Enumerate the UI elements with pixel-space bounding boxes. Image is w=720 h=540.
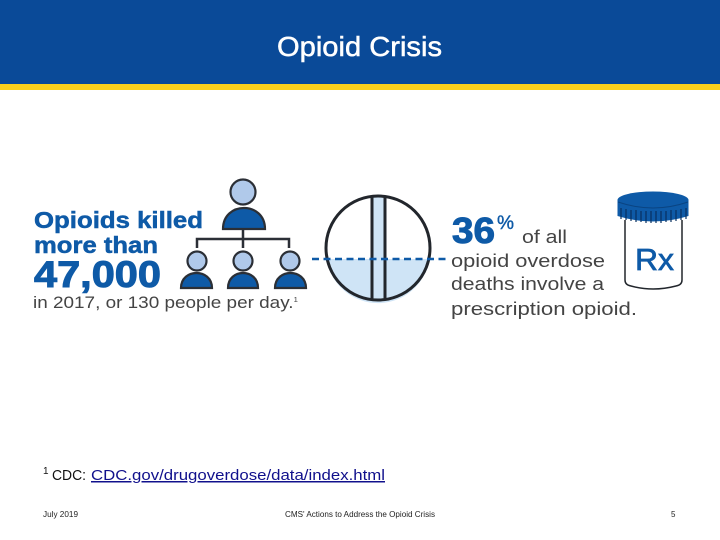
header band [0,0,720,90]
footer: page number: 5 [671,510,676,519]
panel: deaths statistic [33,180,306,312]
icon: person hierarchy [181,180,306,288]
footer: date: July 2019 [43,510,79,519]
icon: prescription bottle [618,192,688,289]
caption: per day: in 2017, or 130 people per day. [33,294,260,312]
heading: opioids killed: 47,000 [34,254,161,295]
heading: opioids killed: more than [34,232,158,258]
title: Opioid Crisis [277,31,442,62]
footnote: CDC: [52,467,86,484]
statistic text: 36 [452,210,495,251]
panel: prescription statistic [312,192,688,319]
heading: opioids killed: Opioids killed [34,207,203,233]
statistic text [451,210,637,319]
footer: presentation title: CMS' Actions to Address the Opioid Crisis [285,510,435,519]
statistic text: opioid overdose [451,251,605,271]
statistic text: of all [522,227,567,247]
heading: opioids killed [34,207,203,295]
icon: prescription bottle: Rx [635,242,675,277]
statistic text: prescription opioid. [451,299,637,319]
statistic text: % [497,213,514,234]
footnote: CDC.gov/drugoverdose/data/index.html [91,467,385,484]
footnote: 1 [43,466,49,477]
icon: pill chart [312,196,446,303]
caption: per day: 1 [294,297,298,304]
statistic text: deaths involve a [451,274,605,294]
